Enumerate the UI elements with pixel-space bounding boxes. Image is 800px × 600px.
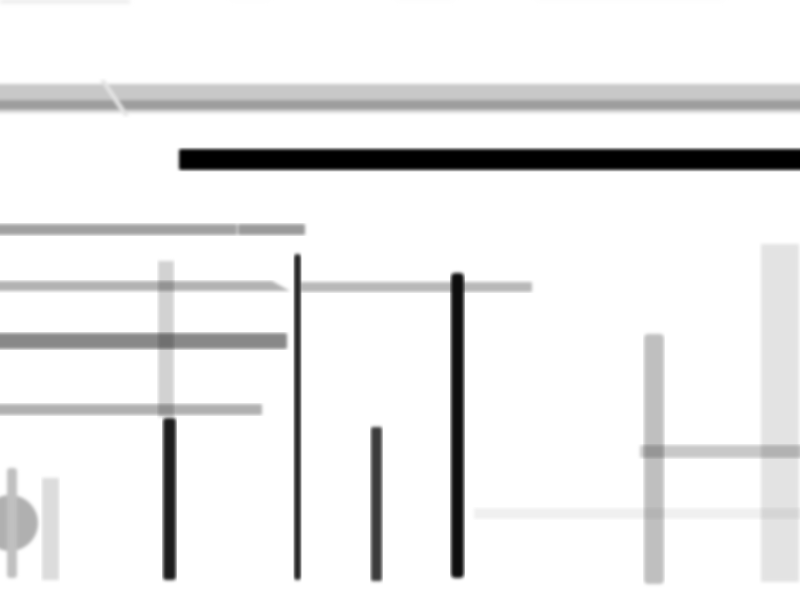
gray horizontal line 2 (0, 281, 532, 292)
black horizontal bar (179, 149, 800, 170)
gray horizontal line 4 (0, 404, 262, 415)
gray horizontal line 1 (0, 224, 305, 235)
gray horizontal line right (640, 445, 800, 458)
pale horizontal line right (474, 508, 800, 519)
thin dark vertical line (294, 254, 301, 580)
light vertical line (158, 261, 174, 417)
top gray band (0, 80, 800, 116)
bottom-left circle with vertical line (0, 468, 38, 578)
medium dark vertical bar (371, 427, 382, 581)
pale wide vertical bar (761, 244, 799, 582)
gray vertical bar (644, 334, 664, 584)
black vertical bar (451, 273, 464, 578)
thick dark vertical bar (163, 418, 176, 580)
dark gray horizontal line 3 (0, 333, 287, 349)
faint smudges along top edge (0, 0, 725, 3)
pale vertical bar bottom-left (42, 478, 59, 580)
